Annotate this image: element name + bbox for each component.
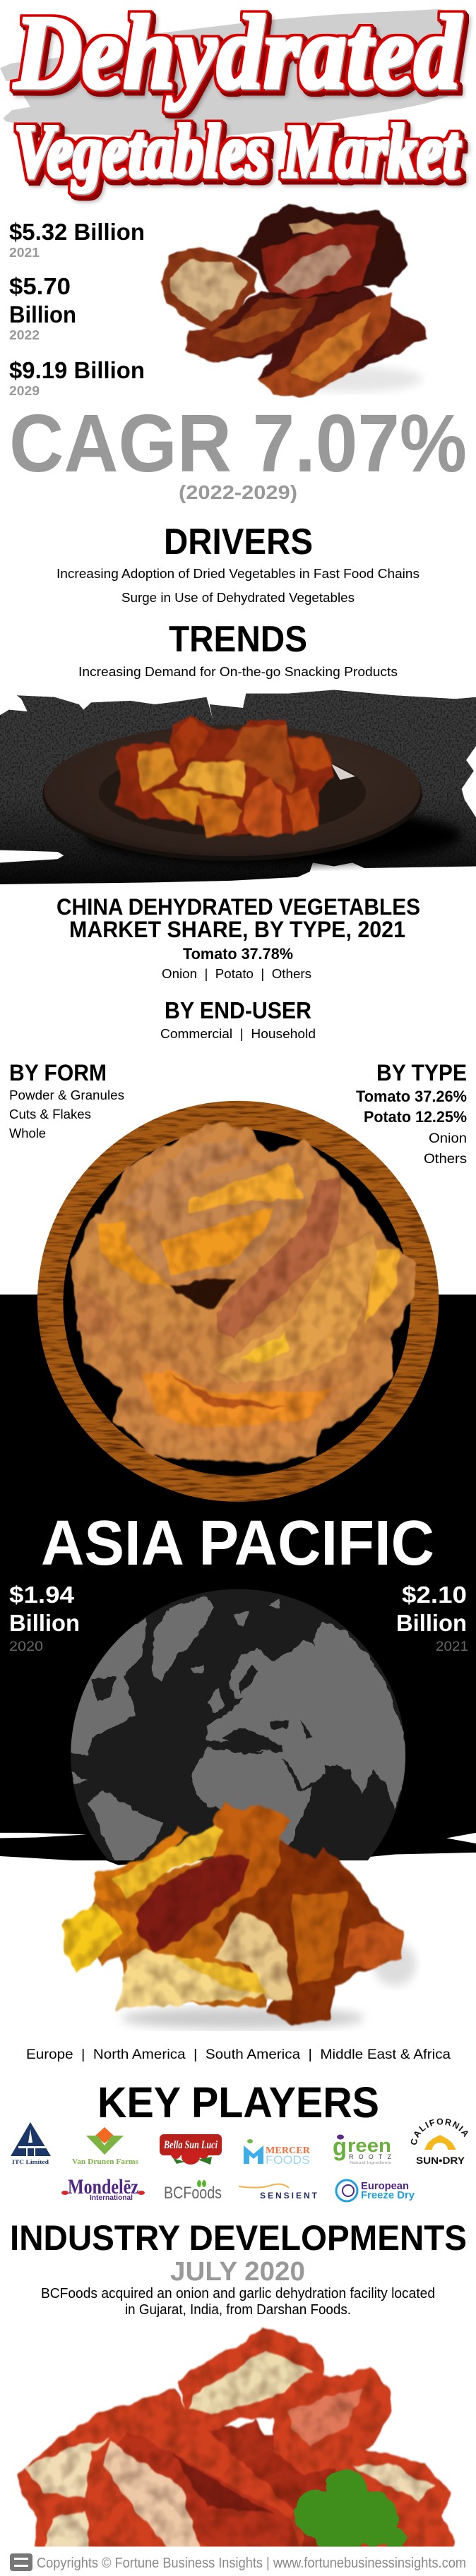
logo: Sensient: SENSIENT xyxy=(260,2191,318,2201)
Asia Pacific 2020 value: $1.94 xyxy=(9,1582,75,1608)
market size stats: 2021 xyxy=(9,246,40,260)
Asia Pacific 2020 value xyxy=(9,1582,80,1654)
photo: plate of dried vegetables on dark brushed band xyxy=(0,690,476,884)
logo: Green Rootz: Natural Ingredients xyxy=(350,2161,392,2165)
logo: Mondelez International: Mondelēz xyxy=(68,2175,138,2198)
title xyxy=(13,0,462,193)
development description: BCFoods acquired an onion and garlic dehydration facility located xyxy=(41,2286,435,2301)
other regions list: Europe | North America | South America | Middle East & Africa xyxy=(26,2047,451,2062)
photo: wooden bowl of dried peach slices xyxy=(37,1101,439,1502)
market size stats: Billion xyxy=(9,301,76,327)
photo: sun-dried tomatoes xyxy=(160,204,427,399)
development description: in Gujarat, India, from Darshan Foods. xyxy=(125,2302,351,2318)
CAGR figure: (2022-2029) xyxy=(179,481,297,503)
logo: ITC Limited xyxy=(11,2122,51,2165)
drivers section: Surge in Use of Dehydrated Vegetables xyxy=(121,591,355,605)
logo: Van Drunen Farms: Van Drunen Farms xyxy=(72,2158,138,2166)
photo: vegetable chips xyxy=(62,1802,416,2029)
by type list xyxy=(356,1060,467,1167)
decorative brush stroke behind the title xyxy=(0,9,465,139)
Asia Pacific 2020 value: 2020 xyxy=(9,1639,43,1654)
Asia Pacific 2021 value xyxy=(396,1582,468,1654)
by type list: BY TYPE xyxy=(376,1060,467,1085)
logo: California Sun-Dry xyxy=(411,2119,468,2166)
logo: ITC Limited: ITC Limited xyxy=(12,2159,49,2165)
by end-user: BY END-USER xyxy=(165,997,311,1023)
by form list: Cuts & Flakes xyxy=(9,1107,91,1121)
logo: Green Rootz: ROOTZ xyxy=(349,2153,391,2160)
logo: Mondelez International: International xyxy=(90,2194,133,2202)
drivers section xyxy=(56,522,420,605)
by type list: Potato 12.25% xyxy=(364,1108,467,1126)
logo: California Sun-Dry: SUN•DRY xyxy=(416,2155,465,2166)
development date: JULY 2020 xyxy=(170,2257,305,2287)
by type list: Tomato 37.26% xyxy=(356,1088,467,1105)
drivers section: Increasing Adoption of Dried Vegetables in Fast Food Chains xyxy=(56,567,420,581)
market size stats: $5.70 xyxy=(9,273,71,299)
by form list: BY FORM xyxy=(9,1060,107,1085)
logo: Van Drunen Farms xyxy=(72,2127,138,2166)
China market share heading: CHINA DEHYDRATED VEGETABLES xyxy=(56,894,420,920)
by end-user xyxy=(160,997,316,1041)
logo: Mercer Foods: FOODS xyxy=(266,2153,310,2167)
development description xyxy=(41,2286,435,2318)
logo: Sensient xyxy=(239,2184,318,2201)
market size stats: 2022 xyxy=(9,328,40,342)
trends section: Increasing Demand for On-the-go Snacking Products xyxy=(78,665,398,679)
logo: Green Rootz: g xyxy=(333,2132,347,2161)
trends section xyxy=(78,619,398,679)
logo: Green Rootz: reen xyxy=(347,2135,391,2156)
drivers section: DRIVERS xyxy=(164,522,313,562)
black band xyxy=(0,1294,476,1865)
trends section: TRENDS xyxy=(169,619,307,660)
China market share heading: Onion | Potato | Others xyxy=(162,967,311,981)
logo: Green Rootz xyxy=(333,2132,392,2165)
logo: Mercer Foods: MERCER xyxy=(266,2145,311,2156)
market size stats: $9.19 Billion xyxy=(9,357,145,383)
logo: European Freeze Dry: European xyxy=(361,2180,409,2192)
logo: European Freeze Dry xyxy=(336,2180,415,2201)
logo: Bella Sun Luci xyxy=(160,2134,222,2165)
by end-user: Commercial | Household xyxy=(160,1027,316,1041)
market size stats: $5.32 Billion xyxy=(9,219,145,245)
China market share heading: MARKET SHARE, BY TYPE, 2021 xyxy=(69,917,405,942)
market size stats: 2029 xyxy=(9,384,40,398)
world globe xyxy=(71,1589,405,1860)
by type list: Others xyxy=(424,1152,467,1167)
photo: dried tomatoes with parsley xyxy=(18,2327,456,2558)
logo: European Freeze Dry: Freeze Dry xyxy=(361,2189,415,2201)
by form list xyxy=(9,1060,124,1140)
Asia Pacific 2021 value: Billion xyxy=(396,1610,467,1636)
Asia Pacific 2021 value: $2.10 xyxy=(402,1582,467,1608)
logo: California Sun-Dry: CALIFORNIA xyxy=(411,2119,468,2145)
key players heading: KEY PLAYERS xyxy=(97,2078,379,2126)
by form list: Powder & Granules xyxy=(9,1088,124,1102)
by type list: Onion xyxy=(429,1131,467,1146)
logo: Bella Sun Luci: Bella Sun Luci xyxy=(163,2139,218,2151)
logo: Mercer Foods xyxy=(244,2139,311,2167)
logo: BCFoods: BCFoods xyxy=(164,2184,222,2203)
Asia Pacific 2021 value: 2021 xyxy=(436,1639,468,1654)
China market share heading xyxy=(56,894,420,981)
market size stats xyxy=(9,219,145,398)
Asia Pacific 2020 value: Billion xyxy=(9,1610,80,1636)
by form list: Whole xyxy=(9,1126,46,1140)
region heading: Asia Pacific: ASIA PACIFIC xyxy=(41,1508,434,1579)
China market share heading: Tomato 37.78% xyxy=(183,945,293,963)
